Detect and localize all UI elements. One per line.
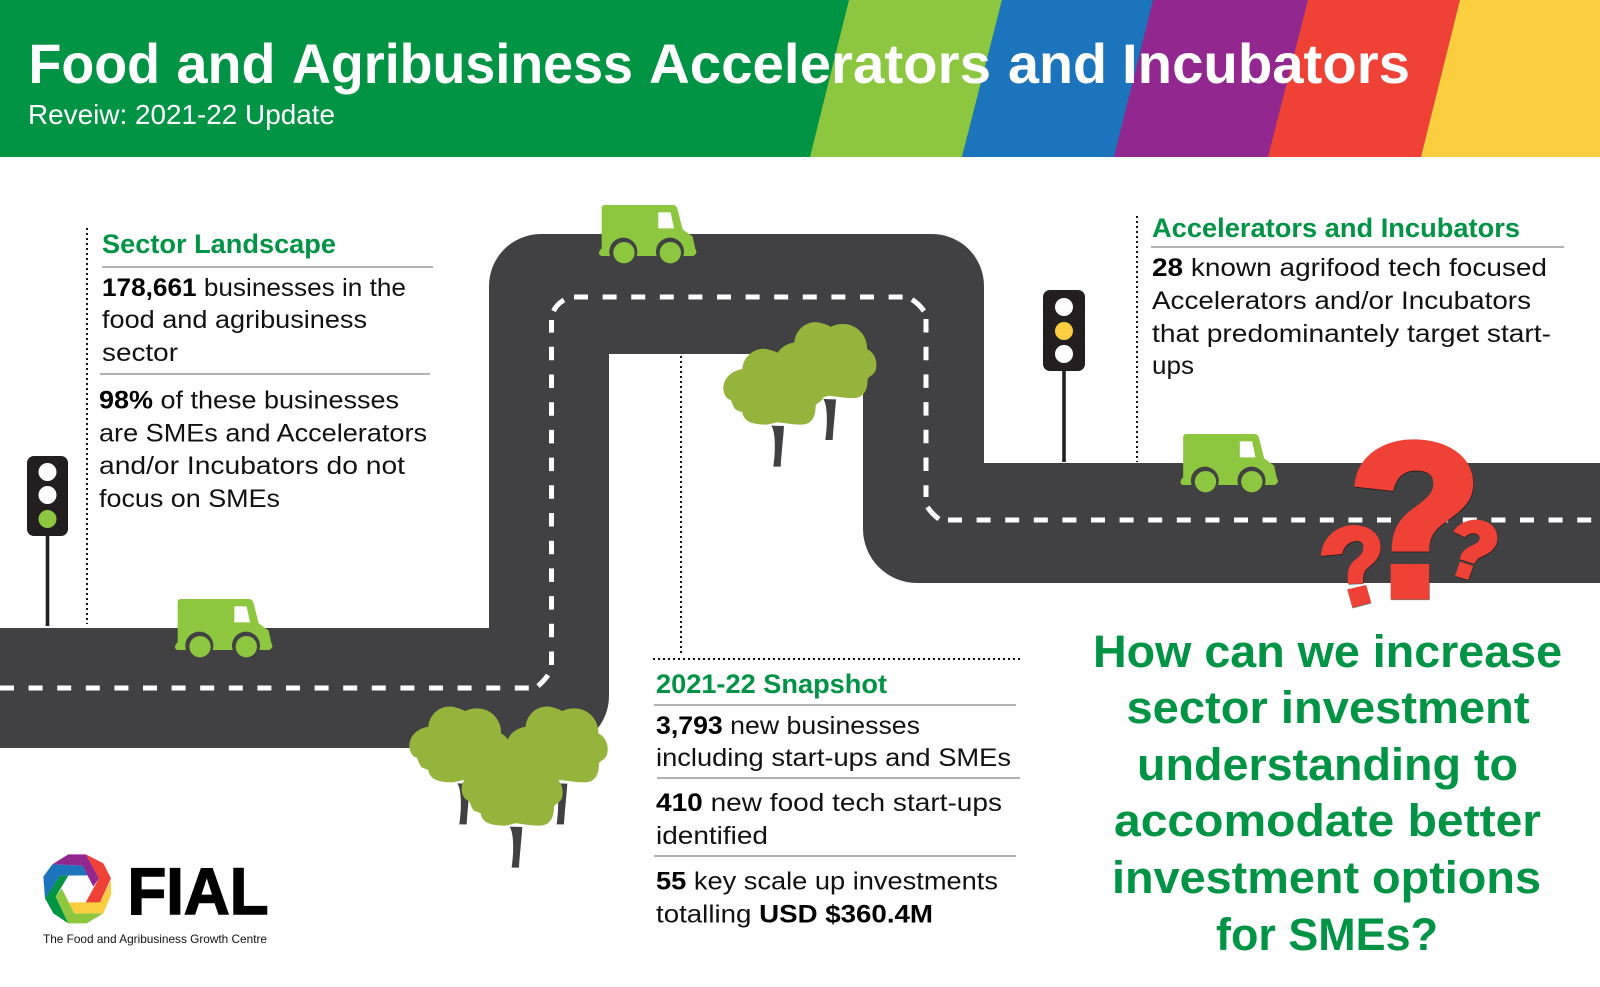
text: SME share: focus on SMEs	[99, 485, 280, 513]
icon: van on top road	[599, 205, 696, 266]
text: SME share: 98% of these businesses	[99, 386, 399, 414]
text: business count: 178,661 businesses in the	[102, 274, 406, 302]
road	[0, 234, 1600, 748]
text: scale up investments: totalling USD $360.4M	[656, 900, 933, 928]
icon: question marks	[1321, 439, 1497, 608]
heading: accelerators and incubators: Accelerators and Incubators	[1152, 213, 1520, 243]
text: SME share	[99, 386, 427, 513]
heading: snapshot: 2021-22 Snapshot	[656, 669, 887, 699]
callout: closing question: investment options	[1112, 852, 1541, 903]
callout: closing question: for SMEs?	[1216, 909, 1438, 960]
text: scale up investments: 55 key scale up investments	[656, 868, 998, 896]
callout: closing question: sector investment	[1126, 682, 1530, 733]
text: food tech start-ups	[656, 789, 1002, 850]
title: and	[1008, 32, 1107, 95]
callout: closing question: accomodate better	[1114, 795, 1541, 846]
title: Incubators	[1122, 32, 1410, 95]
callout: closing question	[1093, 626, 1562, 960]
header banner	[0, 0, 1600, 157]
text: known accelerators: that predominantely target start-	[1152, 320, 1551, 348]
icon: lower trees	[409, 706, 608, 868]
heading: sector landscape: Sector Landscape	[102, 229, 336, 259]
text: known accelerators: Accelerators and/or Incubators	[1152, 287, 1531, 315]
icon: upper trees	[723, 322, 876, 467]
title: and	[176, 32, 276, 95]
text: SME share: and/or Incubators do not	[99, 452, 405, 480]
title: Agribusiness	[292, 32, 633, 95]
text: business count: food and agribusiness	[102, 306, 367, 334]
panel: 2021-22 snapshot	[653, 356, 1020, 928]
subtitle: Reveiw: 2021-22 Update	[28, 99, 335, 130]
text: new businesses: including start-ups and SMEs	[656, 744, 1011, 772]
text: food tech start-ups: identified	[656, 822, 768, 850]
text: scale up investments	[656, 868, 998, 928]
text: SME share: are SMEs and Accelerators	[99, 420, 427, 448]
traffic light: green	[27, 456, 68, 626]
callout: closing question: understanding to	[1137, 739, 1518, 790]
text: new businesses	[656, 712, 1011, 772]
title: Accelerators	[649, 32, 991, 95]
text: known accelerators: 28 known agrifood tech focused	[1152, 254, 1547, 282]
text: business count	[102, 274, 406, 367]
callout: closing question: How can we increase	[1093, 626, 1562, 677]
logo: FIAL	[43, 854, 268, 946]
panel: sector landscape	[87, 228, 433, 624]
text: food tech start-ups: 410 new food tech start-ups	[656, 789, 1002, 817]
title: Food	[28, 32, 160, 95]
text: known accelerators: ups	[1152, 352, 1194, 380]
icon: van on left road	[175, 599, 272, 660]
traffic light: amber	[1043, 290, 1085, 462]
icon: van on right road	[1180, 434, 1278, 495]
logo: FIAL: FIAL	[128, 854, 268, 928]
logo: FIAL: The Food and Agribusiness Growth Centre	[43, 932, 267, 946]
text: new businesses: 3,793 new businesses	[656, 712, 920, 740]
text: known accelerators	[1152, 254, 1551, 380]
text: business count: sector	[102, 339, 178, 367]
icon: FIAL ring	[43, 854, 111, 923]
panel: accelerators and incubators	[1137, 213, 1564, 462]
